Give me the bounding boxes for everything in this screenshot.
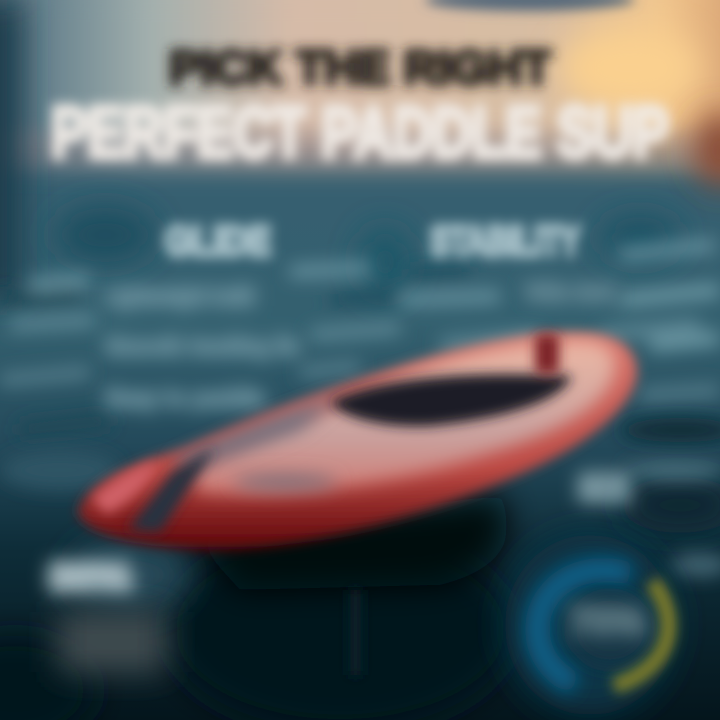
dark traction pad [330,374,572,426]
text block: right description: Wide deck [525,279,616,306]
stat heading: 30% [49,557,131,599]
text block: left description: Smooth tracking fin [105,333,300,360]
yellow arc [614,582,668,686]
wave texture [0,245,720,430]
text block: left description [105,283,300,412]
donut chart [505,535,675,715]
board rail [78,333,637,550]
dark tail band [128,448,215,532]
column heading: right: STABILITY [430,217,580,264]
title line 1: PICK THE RIGHT [169,42,551,95]
blue arc [537,570,630,684]
column heading: left: GLIDE [165,217,271,264]
center handle [233,474,337,490]
board deck [193,340,616,494]
nose stripe [92,462,158,514]
board shadow [190,495,508,590]
paddle board [78,333,637,590]
fin mount [535,334,559,374]
stat description [58,612,166,672]
chart value: 70% [569,601,645,643]
upper left grey fade [170,392,345,470]
center divider [350,590,361,675]
callout label: right: SIZE [578,467,630,508]
stat block: bottom left [49,557,166,672]
text block: left description: Lightweight build [105,283,255,310]
dark ring center [570,594,650,666]
chart glow [505,535,675,715]
text block: left description: Easy to paddle [105,385,265,412]
